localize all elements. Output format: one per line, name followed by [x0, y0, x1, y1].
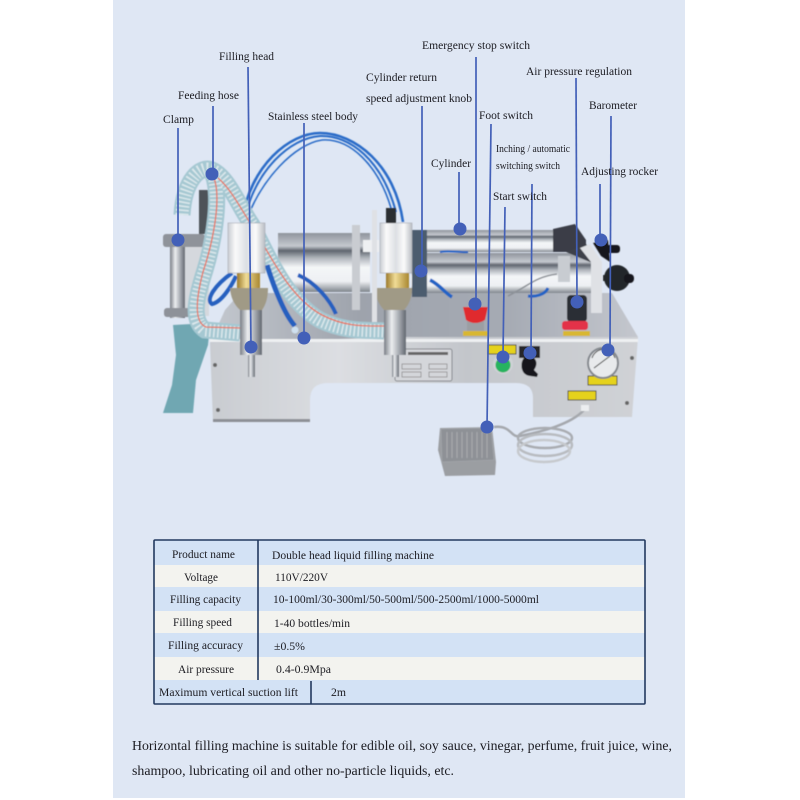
pointer: adjusting rocker: [594, 184, 608, 246]
pointer: inching switch: [524, 184, 536, 360]
row: filling capacity: Filling capacity: [170, 592, 241, 606]
description paragraph: [132, 739, 672, 779]
label: foot switch: Foot switch: [479, 108, 533, 122]
row: voltage: [184, 570, 328, 584]
warning labels: [488, 345, 617, 400]
row: voltage: Voltage: [184, 570, 218, 584]
row: filling accuracy: Filling accuracy: [168, 638, 243, 652]
front plate: [210, 337, 638, 422]
foot switch: [438, 405, 589, 476]
spec plate: [395, 349, 452, 381]
pointer: start switch: [496, 207, 510, 364]
blue loops left: [210, 273, 236, 304]
start button: [493, 354, 513, 374]
air regulator: [562, 295, 590, 336]
row: air pressure: 0.4-0.9Mpa: [276, 662, 332, 676]
rocker knobs: [593, 240, 634, 291]
blue tubes on right: [430, 280, 452, 297]
pointer: stainless steel body: [298, 123, 310, 344]
table rows: [154, 540, 645, 704]
row: maximum vertical suction lift: 2m: [331, 685, 347, 699]
spiral hoses: [182, 169, 384, 333]
pointer: air pressure regulation: [570, 78, 584, 308]
pointer: barometer: [602, 116, 614, 356]
air tube arc: [242, 133, 403, 222]
row: filling accuracy: [168, 638, 305, 653]
lower hose hanging down left: [163, 323, 210, 413]
callout labels: [163, 38, 658, 203]
label: adjusting rocker: Adjusting rocker: [581, 164, 658, 178]
machine illustration: [163, 133, 638, 476]
pointer: filling head: [244, 67, 258, 354]
row: voltage: 110V/220V: [275, 570, 328, 584]
left filling head: [228, 223, 268, 377]
right cylinders: [411, 230, 566, 252]
label: cylinder return knob: Cylinder return: [366, 70, 437, 84]
emergency stop: [463, 307, 488, 336]
deck top: [210, 293, 638, 343]
specification table: [154, 540, 645, 704]
pointer: foot switch: [480, 124, 494, 434]
pointer: clamp: [172, 128, 184, 246]
rear cylinders left: [278, 233, 370, 292]
rivets: [213, 363, 217, 367]
selector switch: [522, 356, 538, 377]
label: feeding hose: Feeding hose: [178, 88, 239, 102]
row: filling speed: 1-40 bottles/min: [274, 616, 350, 630]
label: cylinder: Cylinder: [431, 156, 471, 170]
row: air pressure: [178, 662, 332, 676]
row: product name: Product name: [172, 547, 235, 561]
row: maximum vertical suction lift: Maximum vertical suction lift: [159, 685, 299, 699]
pointer: cylinder: [454, 172, 466, 236]
pointer: cylinder return knob: [414, 106, 428, 278]
callout lines and dots: [172, 57, 614, 434]
background panel: [113, 0, 685, 798]
row: product name: Double head liquid filling machine: [272, 548, 434, 562]
description paragraph: Horizontal filling machine is suitable for edible oil, soy sauce, vinegar, perfume, fruit juice, wine,: [132, 739, 672, 754]
label: inching switch: [496, 144, 570, 172]
row: filling accuracy: ±0.5%: [274, 639, 305, 653]
description paragraph: shampoo, lubricating oil and other no-particle liquids, etc.: [132, 764, 454, 779]
label: filling head: Filling head: [219, 49, 274, 63]
row: air pressure: Air pressure: [178, 662, 234, 676]
gauge: [588, 348, 618, 378]
label: barometer: Barometer: [589, 98, 637, 112]
label: cylinder return knob: speed adjustment knob: [366, 91, 472, 105]
pointer: feeding hose: [206, 106, 218, 180]
label: stainless steel body: Stainless steel body: [268, 109, 358, 123]
table borders: [154, 540, 645, 704]
row: filling capacity: 10-100ml/30-300ml/50-500ml/500-2500ml/1000-5000ml: [273, 592, 540, 606]
label: cylinder return knob: [366, 70, 472, 105]
label: inching switch: Inching / automatic: [496, 144, 570, 155]
label: emergency stop switch: Emergency stop switch: [422, 38, 530, 52]
right filling head: [352, 208, 412, 377]
pointer: emergency stop: [468, 57, 482, 310]
left pump body: [163, 190, 214, 318]
label: air pressure regulation: Air pressure regulation: [526, 64, 632, 78]
label: clamp: Clamp: [163, 112, 194, 126]
label: inching switch: switching switch: [496, 161, 561, 172]
row: filling speed: [173, 615, 350, 630]
row: product name: [172, 547, 434, 562]
label: start switch: Start switch: [493, 189, 547, 203]
right bracket: [580, 244, 602, 313]
row: filling speed: Filling speed: [173, 615, 232, 629]
